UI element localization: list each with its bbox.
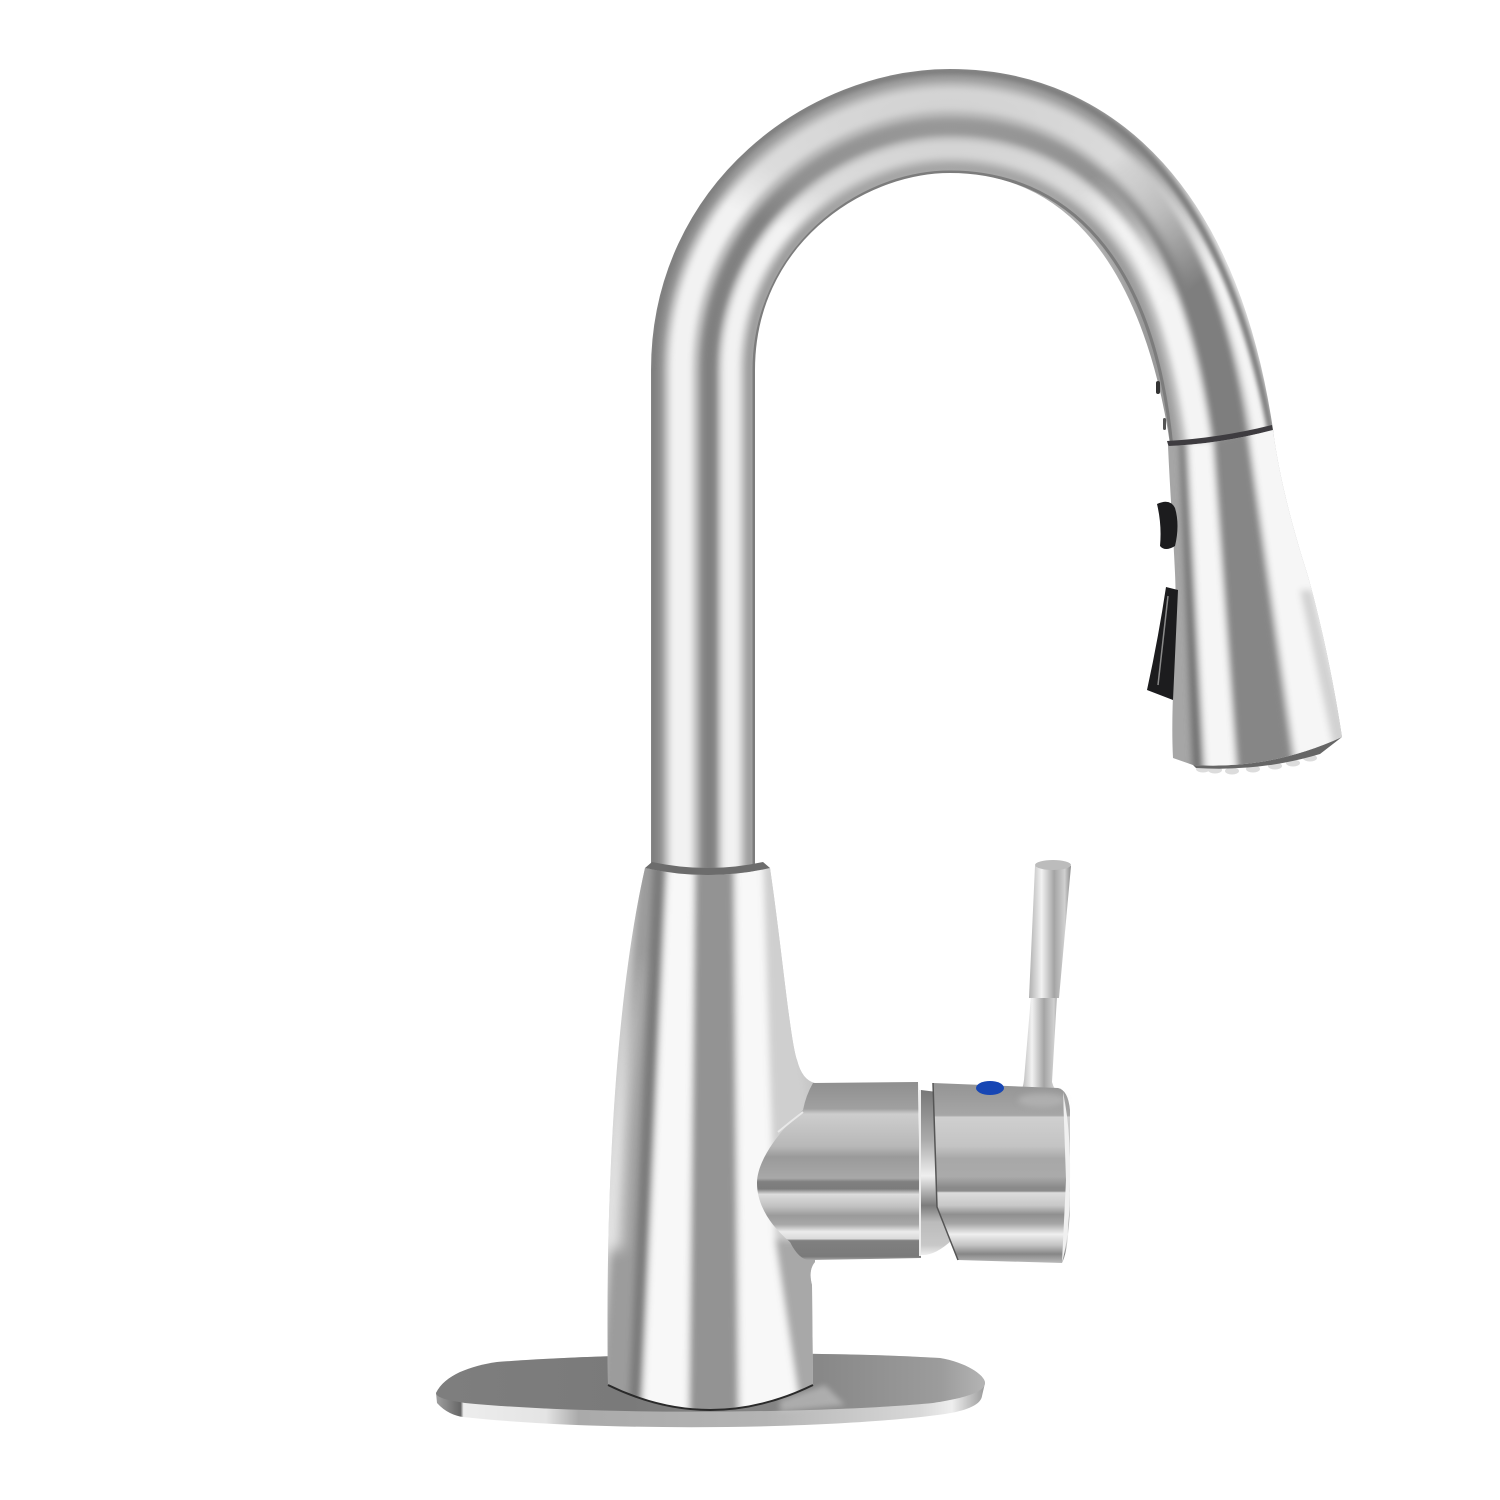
- nozzle teeth: [1196, 754, 1317, 774]
- cone bottom line: [608, 1385, 813, 1410]
- gooseneck spout: [651, 69, 1274, 875]
- lever handle: [1020, 860, 1071, 1094]
- cone top lip: [645, 862, 770, 875]
- small buttons on spout: [1156, 381, 1166, 430]
- faucet illustration: [436, 69, 1342, 1428]
- valve neck ring: [921, 1090, 952, 1255]
- hub body: [757, 1082, 921, 1260]
- mounting plate: [436, 1354, 985, 1427]
- faucet base cone: [600, 860, 825, 1420]
- spray head: [1168, 430, 1342, 774]
- handle body: [933, 1083, 1070, 1263]
- spray head buttons: [1147, 502, 1178, 700]
- dark collar ring on spray head: [1167, 425, 1273, 448]
- blue indicator dot: [976, 1081, 1004, 1095]
